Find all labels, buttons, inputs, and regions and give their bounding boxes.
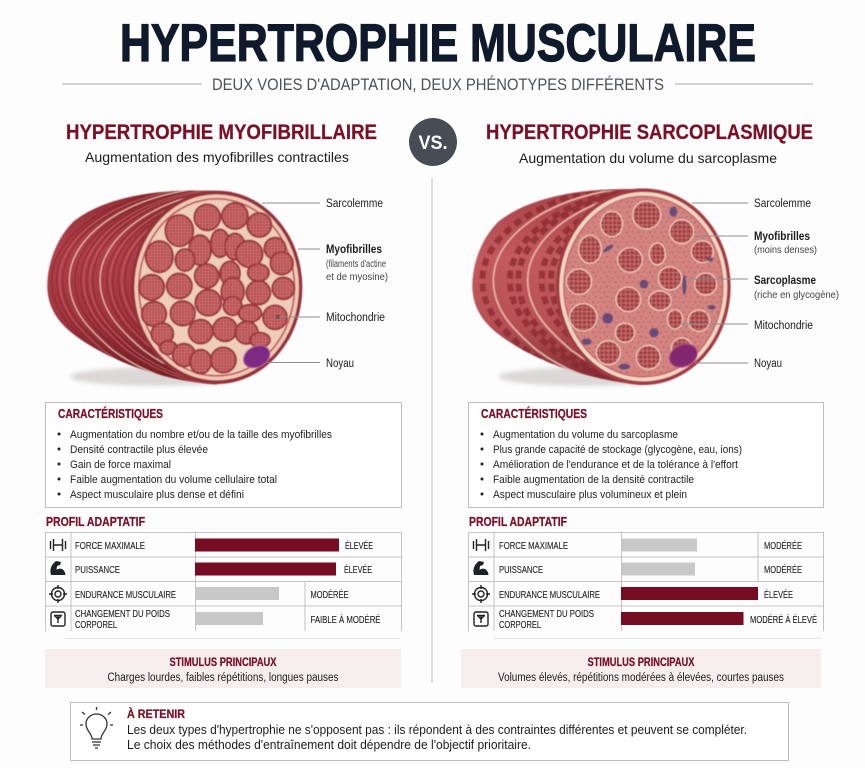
row values: ÉLEVÉE (764, 588, 793, 601)
heading: left: HYPERTROPHIE MYOFIBRILLAIRE (66, 121, 377, 144)
labels: right illustration: Mitochondrie (754, 320, 813, 332)
illustration: sarcoplasmic muscle fibre (472, 188, 731, 387)
panel: stimulus left: Charges lourdes, faibles répétitions, longues pauses (108, 672, 339, 684)
icon: light bulb (80, 707, 113, 748)
nucleus (665, 339, 701, 372)
heading: right: Augmentation du volume du sarcoplasme (519, 150, 777, 166)
myofibrils (139, 203, 294, 374)
row labels: PUISSANCE (75, 565, 120, 576)
cut face (556, 188, 731, 385)
labels: right illustration: (riche en glycogène) (754, 290, 839, 301)
myofibrils (566, 201, 717, 369)
row values (310, 539, 381, 626)
icon: dumbbell (50, 539, 66, 551)
labels: left illustration: Mitochondrie (326, 312, 385, 324)
labels: left illustration: (filaments d'actine (326, 259, 386, 270)
icon: flexed arm (50, 561, 66, 575)
row values: ÉLEVÉE (344, 563, 372, 576)
labels: right illustration: Myofibrilles (754, 231, 810, 243)
panel: stimulus right: Volumes élevés, répétitions modérées à élevées, courtes pauses (498, 672, 784, 684)
labels: left illustration: Sarcolemme (326, 198, 383, 210)
cut face (131, 191, 302, 384)
bars (621, 538, 758, 625)
panel: adaptive profile left (46, 515, 402, 631)
panel: characteristics right: Amélioration de l'endurance et de la tolérance à l'effort (493, 459, 738, 471)
panel: characteristics right (468, 402, 824, 508)
row values: MODÉRÉE (310, 588, 349, 601)
panel: stimulus left: STIMULUS PRINCIPAUX (170, 657, 277, 669)
icon: dumbbell (474, 539, 488, 551)
row values: MODÉRÉE (764, 563, 802, 576)
labels: left illustration: et de myosine) (326, 272, 388, 283)
panel: characteristics right: Aspect musculaire plus volumineux et plein (493, 489, 687, 501)
callout: key takeaway: À RETENIR (127, 706, 185, 721)
labels: left illustration (262, 198, 388, 370)
row labels: ENDURANCE MUSCULAIRE (75, 590, 176, 601)
panel: characteristics left: CARACTÉRISTIQUES (58, 406, 163, 421)
row labels: FORCE MAXIMALE (499, 541, 568, 552)
panel: adaptive profile right (468, 515, 824, 631)
callout: key takeaway: Les deux types d'hypertrophie ne s'opposent pas : ils répondent à des contraintes différentes et peuvent se compléter. (127, 723, 747, 737)
labels: left illustration: Myofibrilles (326, 244, 382, 256)
VS badge (409, 118, 457, 166)
panel: characteristics right: Plus grande capacité de stockage (glycogène, eau, ions) (493, 444, 742, 456)
row labels: ENDURANCE MUSCULAIRE (499, 590, 600, 601)
panel: characteristics left: Densité contractile plus élevée (70, 444, 208, 456)
row values: MODÉRÉE (764, 539, 802, 552)
labels: right illustration: Noyau (754, 358, 782, 370)
row values (750, 539, 817, 626)
panel: characteristics left: Faible augmentation du volume cellulaire total (70, 474, 277, 486)
callout: key takeaway: Le choix des méthodes d'entraînement doit dépendre de l'objectif prioritaire. (127, 738, 531, 752)
icon: target (472, 585, 490, 603)
row values: FAIBLE À MODÉRÉ (310, 613, 381, 626)
panel: adaptive profile right: PROFIL ADAPTATIF (469, 515, 567, 529)
panel: characteristics left: Gain de force maximal (70, 459, 171, 471)
panel: stimulus right (461, 649, 821, 688)
subtitle: DEUX VOIES D'ADAPTATION, DEUX PHÉNOTYPES DIFFÉRENTS (212, 75, 664, 94)
row labels: PUISSANCE (499, 565, 543, 576)
glycogen clusters (582, 207, 716, 370)
panel: stimulus right: STIMULUS PRINCIPAUX (588, 657, 695, 669)
row values: MODÉRÉ À ÉLEVÉ (750, 613, 817, 626)
icon: scale (51, 612, 65, 626)
panel: stimulus left (45, 649, 401, 688)
bars (195, 538, 339, 625)
labels: right illustration (680, 198, 839, 370)
icon: flexed arm (473, 561, 488, 575)
row labels (499, 541, 600, 631)
panel: characteristics right: Faible augmentation de la densité contractile (493, 474, 694, 486)
panel: adaptive profile left: PROFIL ADAPTATIF (46, 515, 145, 529)
heading: right: HYPERTROPHIE SARCOPLASMIQUE (486, 121, 813, 144)
panel: characteristics right: Augmentation du volume du sarcoplasme (493, 429, 678, 441)
heading: left: Augmentation des myofibrilles contractiles (85, 149, 349, 165)
VS badge: VS. (418, 133, 448, 154)
labels: left illustration: Noyau (326, 358, 354, 370)
labels: right illustration: (moins denses) (754, 245, 817, 256)
row labels: CORPOREL (499, 620, 541, 631)
labels: right illustration: Sarcolemme (754, 198, 811, 210)
panel: characteristics left: Aspect musculaire plus dense et défini (70, 489, 244, 501)
row labels: CHANGEMENT DU POIDS (499, 609, 594, 620)
panel: characteristics left: Augmentation du nombre et/ou de la taille des myofibrilles (70, 429, 332, 441)
row labels: FORCE MAXIMALE (75, 541, 145, 552)
illustration: dense muscle fibre (47, 188, 302, 387)
row labels: CORPOREL (75, 620, 117, 631)
callout: key takeaway (70, 702, 788, 760)
heading: right (486, 121, 813, 166)
row values: ÉLEVÉE (345, 539, 373, 552)
row labels: CHANGEMENT DU POIDS (75, 609, 170, 620)
row labels (75, 541, 176, 631)
panel: characteristics left (46, 402, 402, 508)
icon: scale (474, 612, 488, 626)
panel: characteristics right: CARACTÉRISTIQUES (481, 406, 587, 421)
heading: left (66, 121, 377, 165)
nucleus (239, 341, 274, 372)
icon: target (49, 585, 67, 603)
labels: right illustration: Sarcoplasme (754, 275, 816, 287)
